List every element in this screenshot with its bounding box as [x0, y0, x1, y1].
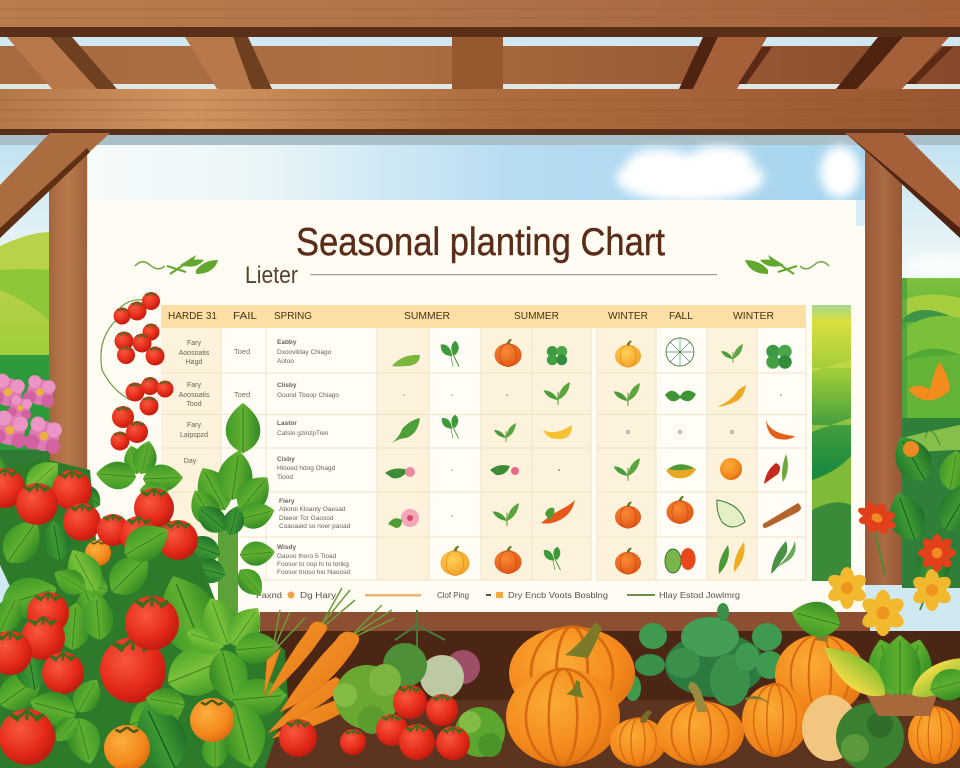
carrot tops — [272, 588, 395, 653]
main beam — [0, 89, 960, 129]
planting table — [161, 305, 806, 580]
legend: Dg Hary — [300, 590, 337, 600]
row labels column one: Fary — [187, 340, 202, 347]
table header: FALL — [669, 310, 693, 322]
carrot bodies — [264, 622, 359, 738]
front pumpkins — [610, 682, 960, 768]
row 2 icons — [403, 382, 782, 407]
herbs and small tomatoes — [279, 610, 505, 760]
crop notes column: Tiood — [277, 474, 293, 481]
row 3 icons — [392, 415, 795, 443]
crop notes column: Eabby — [277, 339, 297, 346]
red flowers — [852, 495, 956, 572]
legend — [256, 590, 740, 600]
right side foliage — [882, 418, 960, 588]
crop notes column: Wisdy — [277, 544, 296, 551]
short vertical post — [452, 37, 503, 89]
flower stems — [875, 533, 937, 610]
crop notes column: Coaoaaid so noer paoad — [279, 523, 351, 530]
table header: SUMMER — [404, 310, 450, 322]
table header — [161, 305, 806, 328]
sprig behind tomatoes — [64, 438, 183, 515]
left leaf ornament — [135, 255, 218, 274]
crop notes column: Hlooed hdog Ohagd — [277, 465, 336, 472]
crop notes column: Lastor — [277, 420, 297, 427]
row labels column one: Hagd — [186, 359, 202, 366]
back pumpkins — [506, 620, 865, 765]
legend: Faxnd — [256, 590, 282, 600]
row 4 icons — [385, 454, 788, 484]
basil leaves in front — [26, 592, 288, 768]
pink flowers at left — [0, 374, 62, 470]
crop notes column: Dxoovilday Chiago — [277, 349, 332, 356]
basil plant center — [180, 403, 279, 620]
teal leafy bush — [625, 603, 784, 706]
table header: SPRING — [274, 310, 312, 322]
pumpkin and greens pile — [506, 603, 960, 768]
row labels column one: Fary — [187, 382, 202, 389]
legend: Dry Encb Voots Bosblng — [508, 590, 608, 600]
row labels column one: Fary — [187, 422, 202, 429]
row labels column one: Aoosoatis — [179, 350, 210, 357]
plant pot — [865, 692, 938, 716]
row labels column two: Toed — [234, 390, 250, 399]
grid lines — [161, 327, 806, 580]
basil leaves behind tomatoes — [0, 515, 232, 768]
crop notes column: Foosor tnoso hio hlaoosd — [277, 569, 350, 576]
row labels column one: Laipspzd — [180, 432, 208, 439]
row labels column one: Day — [184, 458, 197, 465]
wooden pergola frame — [0, 0, 960, 135]
large basil and tomato pile — [0, 515, 288, 768]
row labels column one: Tood — [186, 401, 202, 408]
legend: Hlay Estod Jowlmrg — [659, 590, 740, 600]
row labels column one: Aoosoatis — [179, 392, 210, 399]
table header: WINTER — [733, 310, 774, 322]
crop notes column: Aotoo — [277, 358, 294, 365]
chart sheet — [88, 200, 960, 701]
table header: FAIL — [233, 310, 257, 322]
column shading — [161, 327, 806, 580]
crop notes column: Foosor to nop hi to tonkg — [277, 561, 349, 568]
left hills — [0, 232, 50, 470]
title: Seasonal planting Chart — [296, 221, 665, 264]
large tomatoes — [0, 592, 179, 703]
row 1 icons — [392, 338, 792, 369]
rear wooden band — [0, 46, 960, 84]
crop notes column: Dlaeor Tor Gaosod — [279, 515, 334, 522]
upper diagonal braces — [7, 37, 953, 89]
foliage mass behind produce — [0, 458, 288, 768]
row labels column two: Toed — [234, 347, 250, 356]
cherry tomato vine — [101, 292, 174, 450]
right hills — [902, 278, 960, 448]
crop notes column: Fiery — [279, 498, 295, 505]
crop notes column — [277, 339, 351, 576]
upper tomato cluster — [0, 448, 198, 572]
yellow flowers — [825, 567, 954, 636]
crop notes column: Gaooo thoro 5 Tioad — [277, 553, 337, 560]
plant foliage — [787, 595, 960, 707]
crop notes column: Cisby — [277, 456, 295, 463]
backing sky panel with clouds — [88, 145, 865, 203]
legend: Clof Ping — [437, 590, 469, 600]
crop icons — [385, 338, 801, 575]
potted flowering plant — [787, 495, 960, 716]
carrots — [264, 588, 395, 738]
right leaf ornament — [745, 255, 829, 274]
table header: HARDE 31 — [168, 310, 217, 322]
table header: WINTER — [608, 310, 648, 322]
crop notes column: Clisby — [277, 382, 297, 389]
subtitle with rule: Lieter — [245, 262, 298, 289]
row 6 icons — [440, 541, 796, 575]
row 5 icons — [388, 496, 801, 528]
butterfly — [908, 362, 950, 400]
landscape strip at right of chart — [812, 305, 851, 581]
row labels column one — [179, 340, 210, 465]
crop notes column: Catslo gzinzpTien — [277, 430, 329, 437]
crop notes column: Aboroi Kloanly Oaesad — [279, 506, 346, 513]
row labels column two — [234, 347, 250, 399]
wooden ledge under produce — [240, 700, 960, 768]
crop notes column: Gound Tboop Chiago — [277, 392, 339, 399]
top beam — [0, 0, 960, 27]
wooden posts and lower braces — [0, 133, 960, 585]
table header: SUMMER — [514, 310, 559, 322]
